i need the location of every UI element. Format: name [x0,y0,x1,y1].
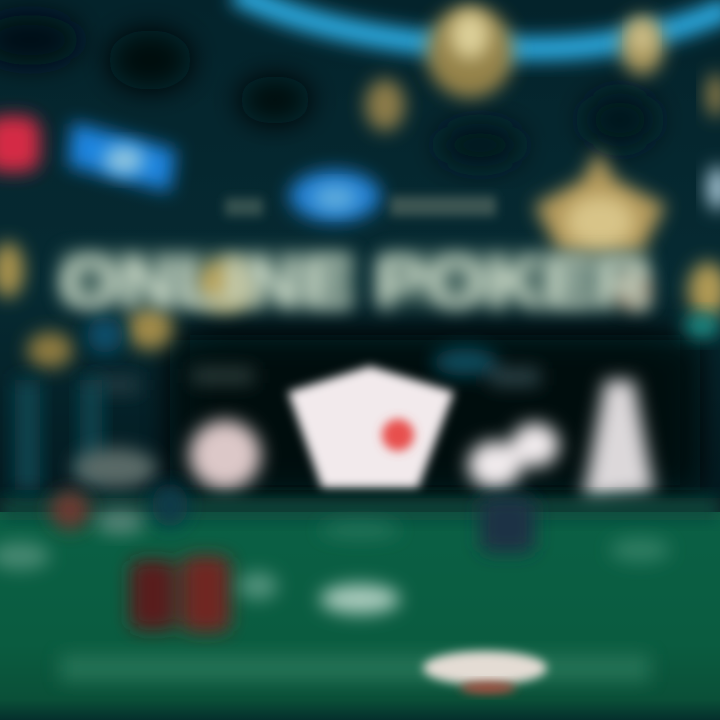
red chip stacks [130,556,230,632]
icon: white dice [468,423,559,489]
neon signs: red and blue [0,116,720,353]
title: ONLINE POKER [60,243,650,321]
playing cards [288,366,454,488]
icon: white chess-like piece [583,380,654,500]
table: green felt [0,498,720,720]
chandeliers: gold lamps [0,6,720,368]
ceiling light: cyan arc [235,0,720,49]
icon: red heart [382,419,414,451]
bottom caption bar [60,654,650,682]
bottom badge [423,651,547,694]
dark chip stack [480,497,535,553]
subtitle line [225,196,496,216]
left side figures [15,380,188,534]
table labels [0,522,670,614]
small labels above the cards [90,348,540,392]
icon: white chip [189,420,261,490]
